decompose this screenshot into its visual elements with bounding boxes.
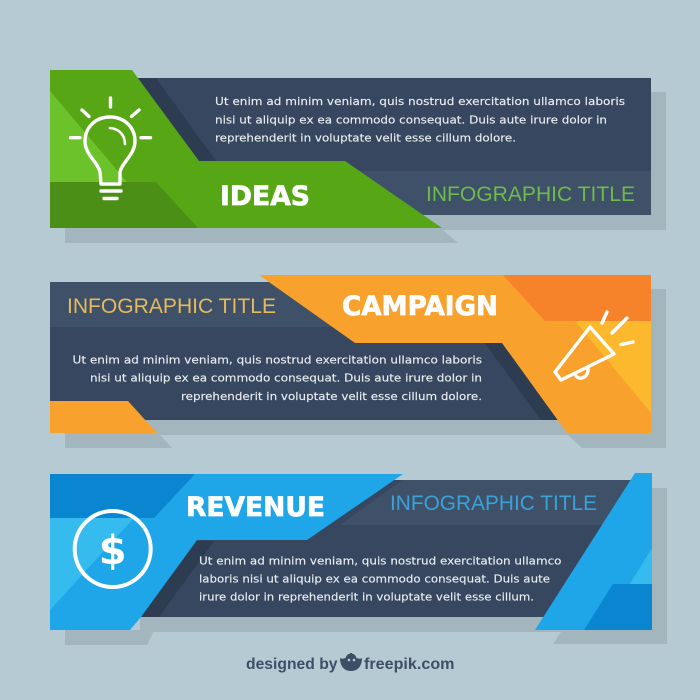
light blue facet <box>50 518 134 610</box>
text block: ideas: reprehenderit in voluptate velit esse cillum dolore. <box>215 132 516 145</box>
panel fold stripe: campaign <box>484 342 560 420</box>
text block: revenue <box>199 554 562 604</box>
credit text: freepik.com: freepik.com <box>364 656 454 673</box>
icon: freepik mascot <box>340 653 362 671</box>
panel: campaign banner <box>50 275 666 448</box>
text block: ideas: Ut enim ad minim veniam, quis nostrud exercitation ullamco laboris <box>215 95 625 108</box>
blue ribbon <box>50 474 403 630</box>
icon: dollar coin: $ <box>99 528 127 574</box>
title strip: ideas <box>340 171 651 215</box>
text block: revenue: irure dolor in reprehenderit in voluptate velit esse cillum. <box>199 591 534 604</box>
panel fold stripe: ideas <box>138 78 216 161</box>
dark blue facet <box>50 474 195 518</box>
text block: revenue: Ut enim ad minim veniam, quis nostrud exercitation ullamco <box>199 554 562 567</box>
light green facet <box>50 91 127 182</box>
banner shadow: ideas <box>65 92 666 243</box>
credit text: designed by: designed by <box>246 656 338 673</box>
icon: dollar coin <box>75 511 151 587</box>
yellow facet <box>575 321 651 413</box>
panel: revenue banner <box>50 473 667 645</box>
icon: light bulb <box>70 98 150 198</box>
text block: campaign: reprehenderit in voluptate velit esse cillum dolore. <box>181 390 482 403</box>
icon: megaphone <box>555 312 633 380</box>
right light blue facet <box>630 548 652 584</box>
text block: campaign <box>72 353 482 403</box>
heading: campaign: CAMPAIGN <box>342 291 498 322</box>
dark text panel: campaign <box>50 282 570 420</box>
banner shadow: campaign <box>65 289 666 448</box>
dark green facet <box>50 182 198 228</box>
orange ribbon <box>259 275 651 433</box>
title: ideas infographic title: INFOGRAPHIC TITLE <box>426 183 635 206</box>
title strip: revenue <box>340 480 640 525</box>
panel: ideas banner <box>50 70 666 243</box>
text block: ideas <box>215 95 625 145</box>
text block: ideas: nisi ut aliquip ex ea commodo consequat. Duis aute irure dolor in <box>215 113 607 126</box>
heading: revenue: REVENUE <box>186 492 325 523</box>
dark text panel: revenue <box>141 480 640 617</box>
panel fold stripe: revenue <box>141 541 214 617</box>
orange corner tab <box>50 401 157 433</box>
banner shadow: revenue <box>65 488 667 645</box>
title strip: campaign <box>50 282 350 327</box>
title: campaign infographic title: INFOGRAPHIC TITLE <box>67 295 276 318</box>
footer credit <box>246 653 454 673</box>
text block: campaign: Ut enim ad minim veniam, quis nostrud exercitation ullamco laboris <box>72 353 482 366</box>
right dark blue facet <box>584 584 652 630</box>
dark orange facet <box>503 275 651 321</box>
text block: campaign: nisi ut aliquip ex ea commodo consequat. Duis aute irure dolor in <box>90 372 482 385</box>
heading: ideas: IDEAS <box>220 181 310 212</box>
text block: revenue: laboris nisi ut aliquip ex ea commodo consequat. Duis aute <box>199 572 550 585</box>
title: revenue infographic title: INFOGRAPHIC TITLE <box>390 492 597 515</box>
right blue ribbon <box>535 473 652 630</box>
dark text panel: ideas <box>130 78 651 215</box>
green ribbon <box>50 70 442 228</box>
